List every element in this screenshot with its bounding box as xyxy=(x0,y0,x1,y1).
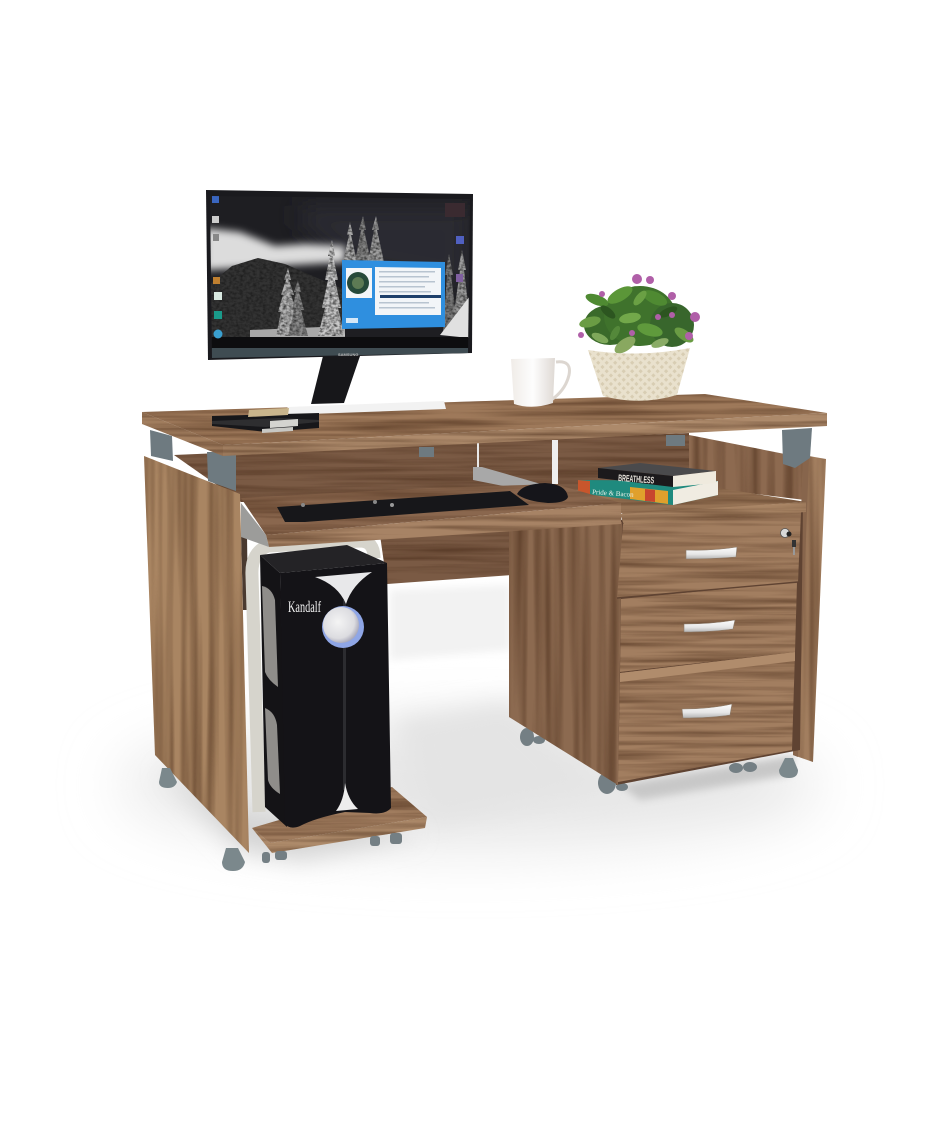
CPU trolley board xyxy=(252,787,427,863)
right outer side panel xyxy=(793,455,826,762)
drawer 2 xyxy=(620,582,797,672)
floor shadow xyxy=(120,585,820,860)
brand: Kandalf xyxy=(288,599,321,616)
pedestal casters back xyxy=(520,728,757,794)
pedestal side xyxy=(509,522,622,785)
silver notch xyxy=(315,572,372,604)
tray rail xyxy=(241,503,269,547)
leaves xyxy=(578,283,696,357)
right shelf xyxy=(572,485,806,525)
woven pot xyxy=(588,348,690,401)
blue player window xyxy=(342,260,445,329)
books xyxy=(578,463,718,505)
computer tower xyxy=(260,545,391,828)
casters xyxy=(262,833,402,863)
monitor stand xyxy=(311,356,360,404)
handle 2 xyxy=(684,620,735,632)
shadow behind tube xyxy=(241,535,248,610)
mouse xyxy=(517,483,568,503)
left side panel xyxy=(144,456,249,853)
screen xyxy=(205,190,475,360)
mug xyxy=(511,358,569,407)
lock and key xyxy=(780,528,796,555)
vent stickers xyxy=(262,586,278,687)
grey tube of CPU trolley xyxy=(252,541,374,812)
drawer backing xyxy=(616,505,803,785)
left feet xyxy=(159,768,245,871)
stand base xyxy=(282,401,446,415)
keyboard xyxy=(277,491,529,522)
drawer 3 xyxy=(618,652,795,782)
plant xyxy=(578,274,700,401)
back panel of desk xyxy=(174,433,689,502)
brand: SAMSUNG xyxy=(338,352,358,357)
taskbar xyxy=(212,348,468,358)
handle 3 xyxy=(682,704,732,718)
drawer 1 xyxy=(617,512,801,598)
monitor xyxy=(205,190,475,415)
flowers xyxy=(578,274,700,340)
lower book: Pride & Bacon xyxy=(592,488,634,499)
upper book: BREATHLESS xyxy=(618,473,654,487)
desktop icons xyxy=(212,196,465,338)
phone xyxy=(248,408,289,417)
right inner side panel xyxy=(689,435,805,500)
monitor bezel xyxy=(206,190,473,360)
keyboard tray xyxy=(241,484,621,547)
devices on desk xyxy=(212,408,319,433)
snow trees xyxy=(276,216,470,336)
drawer slides xyxy=(473,440,607,505)
handle 1 xyxy=(686,547,737,559)
right foot xyxy=(779,758,798,778)
desktop xyxy=(142,394,827,456)
lower modesty panel xyxy=(380,528,512,584)
power button xyxy=(322,606,364,648)
metal brackets xyxy=(150,428,812,491)
